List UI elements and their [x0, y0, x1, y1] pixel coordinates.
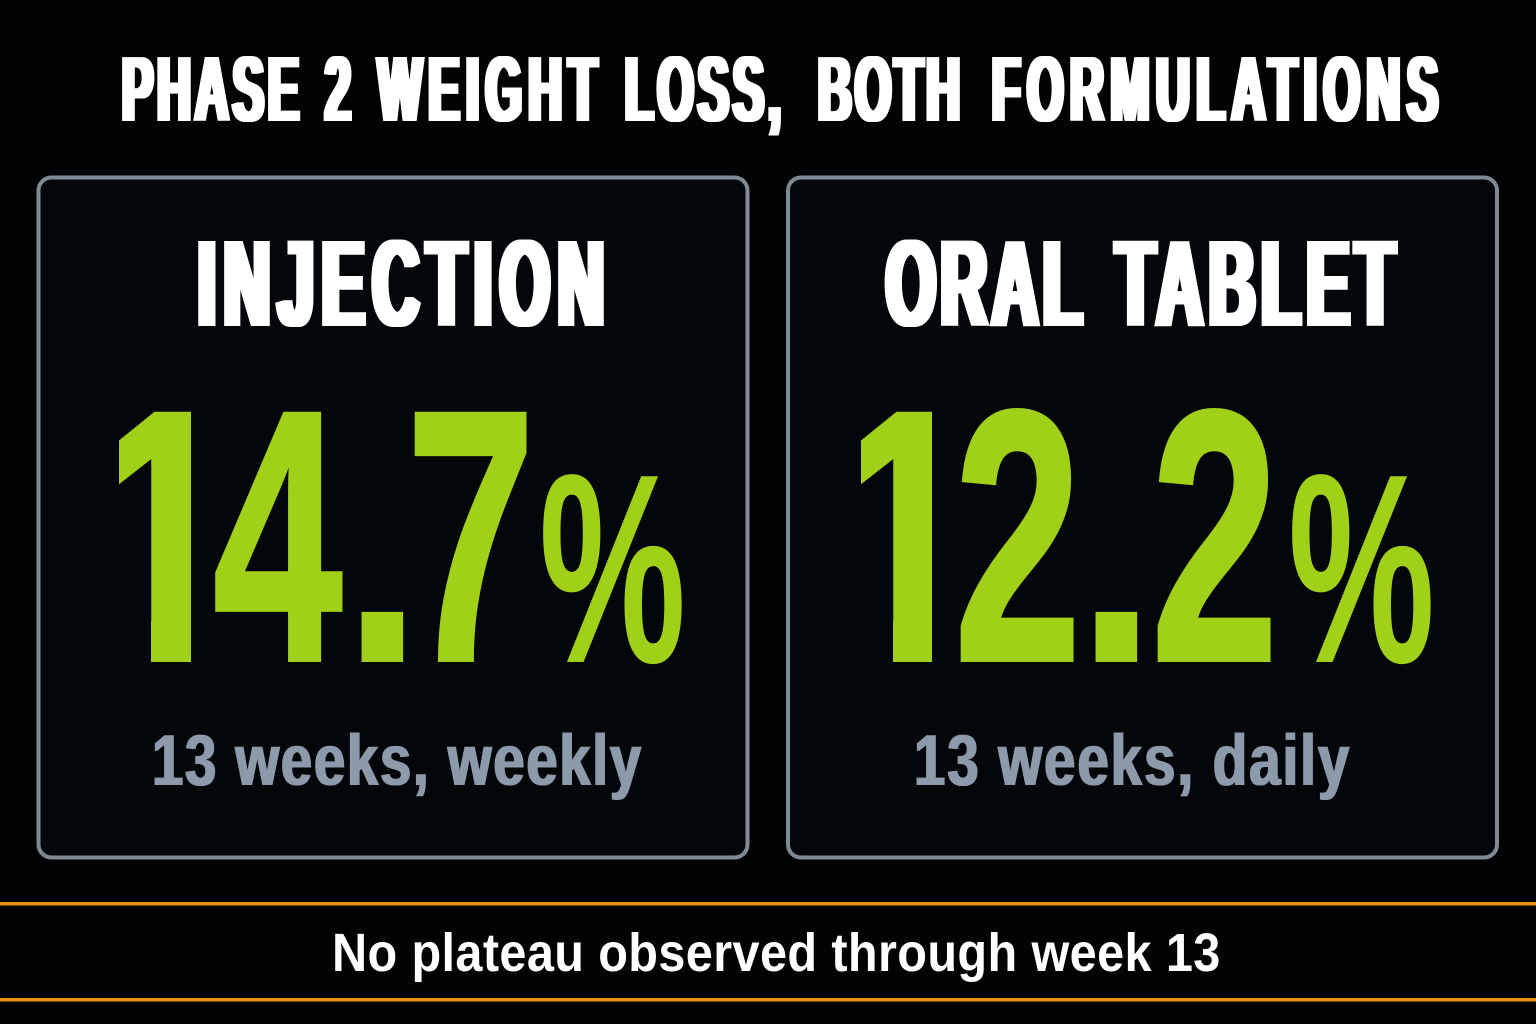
stat: 12.2 percent: . — [1079, 379, 1154, 726]
stat: 12.2 percent — [861, 408, 1431, 664]
caption: oral tablet schedule: 13 weeks, daily — [914, 720, 1349, 801]
heading: oral tablet: TABLET — [1116, 214, 1395, 352]
stat: 12.2 percent: 1 — [828, 336, 987, 736]
footer band — [0, 902, 1536, 1002]
caption: injection schedule: 13 weeks, weekly — [152, 720, 641, 801]
heading: oral tablet — [886, 214, 1395, 352]
stat: 14.7 percent: % — [539, 419, 686, 720]
title: WEIGHT — [378, 36, 597, 141]
stat: 14.7 percent — [119, 412, 682, 664]
heading: oral tablet: ORAL — [886, 214, 1082, 352]
panel: injection — [38, 178, 748, 858]
stat: 14.7 percent: 1 — [86, 336, 245, 736]
stat: 12.2 percent: 2 — [954, 336, 1081, 736]
title — [122, 36, 1438, 141]
title: BOTH — [818, 36, 960, 141]
title: LOSS, — [625, 36, 781, 141]
panel: oral tablet — [788, 178, 1497, 858]
stat: 14.7 percent: . — [345, 379, 420, 726]
stat: 12.2 percent: 2 — [1151, 336, 1278, 736]
title: PHASE — [122, 36, 299, 141]
footer note: No plateau observed through week 13 — [332, 922, 1220, 983]
heading: injection: INJECTION — [198, 214, 604, 352]
stat: 14.7 percent: 7 — [406, 336, 535, 736]
title: 2 — [325, 36, 351, 141]
stat: 12.2 percent: % — [1288, 419, 1435, 720]
stat: 14.7 percent: 4 — [213, 336, 344, 736]
title: FORMULATIONS — [992, 36, 1438, 141]
